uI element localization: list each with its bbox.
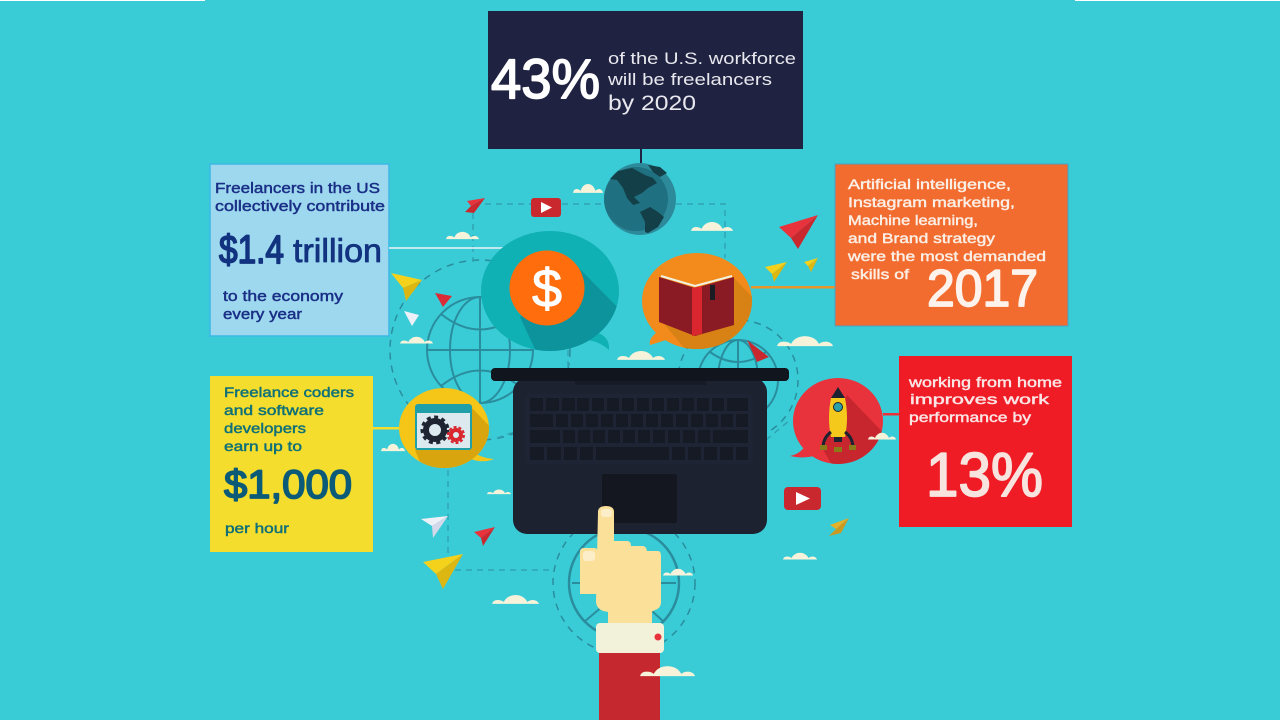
panel: coders: $1,000	[224, 463, 352, 507]
panel: coders: Freelance coders	[224, 384, 354, 400]
title box: 43%: by 2020	[608, 92, 696, 115]
title box: 43%: of the U.S. workforce	[608, 49, 796, 68]
panel: working from home: performance by	[909, 409, 1031, 425]
cloud beside rocket	[868, 433, 896, 440]
panel: coders: earn up to	[224, 438, 302, 454]
connector: coders	[373, 427, 401, 430]
hand pressing trackpad	[580, 506, 664, 720]
panel: economy contribution: to the economy	[223, 289, 344, 305]
panel: skills 2017: were the most demanded	[847, 248, 1046, 264]
panel: skills 2017: skills of	[851, 266, 909, 282]
icon: video play top	[531, 198, 561, 217]
connector: economy	[389, 247, 504, 249]
icon: book speech bubble	[642, 253, 752, 349]
laptop	[491, 368, 789, 534]
cuff button	[654, 634, 662, 640]
icon: rocket speech bubble	[790, 378, 883, 464]
cloud over sleeve	[640, 666, 695, 676]
panel: working from home: improves work	[910, 391, 1051, 407]
thumb	[580, 548, 598, 594]
trackpad	[602, 474, 677, 523]
panel: coders: per hour	[225, 520, 289, 536]
panel: working from home: 13%	[926, 441, 1043, 510]
icon: video play bottom	[784, 487, 821, 510]
panel: economy contribution: Freelancers in the US	[215, 181, 380, 197]
connector: skills	[751, 286, 836, 288]
panel: economy contribution: collectively contribute	[215, 199, 385, 215]
cuff	[596, 623, 664, 653]
title box: 43%	[488, 11, 803, 149]
panel: skills 2017: and Brand strategy	[848, 230, 995, 246]
background globes and dashed connectors	[390, 204, 798, 654]
globe stem	[640, 149, 642, 167]
panel: economy contribution	[210, 164, 389, 336]
title box: 43%: will be freelancers	[607, 70, 772, 89]
icon: dollar speech bubble: $	[532, 259, 562, 319]
sleeve	[599, 650, 660, 720]
panel: economy contribution: $1.4	[219, 228, 284, 272]
panel: skills 2017: Machine learning,	[848, 212, 978, 228]
icon: earth globe	[604, 163, 676, 235]
panel: skills 2017: Artificial intelligence,	[848, 176, 1011, 192]
panel: working from home	[899, 356, 1072, 527]
panel: coders: and software	[224, 402, 324, 418]
connector: home	[883, 413, 899, 416]
icon: dollar speech bubble	[481, 231, 619, 351]
panel: economy contribution: every year	[223, 307, 302, 323]
title box: 43%: 43%	[491, 47, 600, 110]
panel: skills 2017: Instagram marketing,	[848, 194, 1015, 210]
panel: economy contribution: trillion	[293, 232, 382, 269]
wrist	[608, 605, 652, 625]
clouds	[381, 184, 833, 604]
fingers and palm	[596, 506, 661, 612]
panel: skills 2017: 2017	[927, 260, 1038, 318]
keyboard	[525, 394, 753, 464]
paper planes	[391, 198, 849, 589]
panel: skills 2017	[835, 164, 1068, 326]
panel: working from home: working from home	[908, 374, 1062, 390]
panel: coders	[210, 376, 373, 552]
icon: gears speech bubble	[399, 388, 495, 475]
panel: coders: developers	[224, 420, 306, 436]
